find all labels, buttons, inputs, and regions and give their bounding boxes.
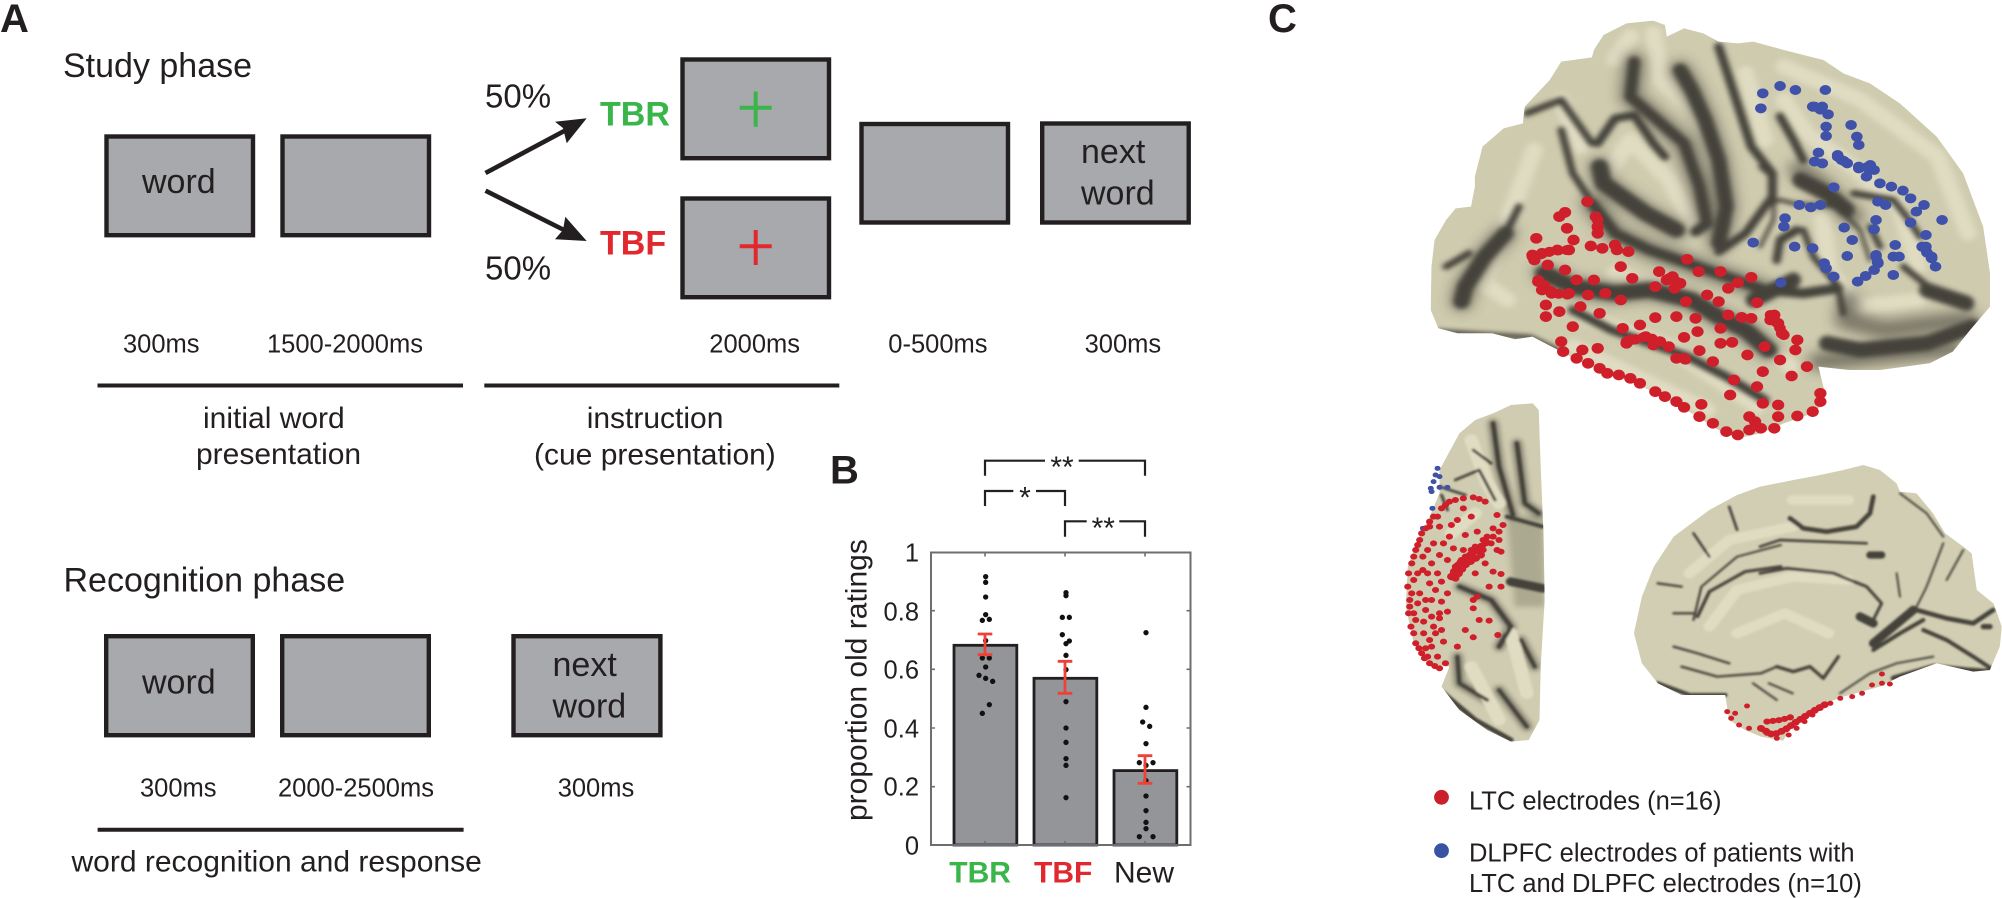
y tick labels (884, 540, 919, 860)
significance brackets: * (1019, 482, 1031, 514)
y tick labels: 0.2 (884, 774, 919, 802)
significance brackets: ** (1092, 512, 1115, 545)
y tick labels: 0 (905, 832, 919, 860)
label: 50% lower: 50% (485, 250, 551, 287)
legend text: DLPFC: DLPFC electrodes of patients with (1469, 840, 1855, 868)
bracket line: instruction (484, 384, 839, 388)
arrow: to TBF (486, 191, 587, 241)
label: TBF: TBF (600, 225, 666, 263)
individual data points (979, 577, 1153, 837)
stimulus box: next word (1042, 124, 1189, 222)
label: TBR: TBR (600, 95, 670, 133)
brain: lateral view with electrodes (1423, 13, 1999, 447)
stimulus box: next word: word (1080, 175, 1155, 213)
stimulus box: next word: next (552, 646, 617, 684)
significance brackets: ** (1050, 451, 1074, 484)
timing: 300ms: 300ms (123, 331, 200, 359)
stimulus box: word (106, 136, 253, 235)
stimulus box: word: word (141, 163, 216, 201)
stimulus box: word: word (141, 663, 216, 701)
legend marker: LTC (1434, 790, 1449, 805)
axes frame (931, 552, 1190, 845)
error bars (978, 634, 1152, 783)
caption: instruction: (cue presentation) (534, 438, 776, 471)
timing: 2000-2500ms: 2000-2500ms (278, 775, 434, 803)
category label: TBF: TBF (1034, 857, 1092, 890)
timing: 0-500ms: 0-500ms (888, 331, 988, 359)
stimulus box: next word (514, 636, 660, 735)
stimulus box: next word: word (552, 687, 626, 725)
caption: initial word presentation: initial word (203, 402, 345, 435)
caption: initial word presentation (196, 402, 361, 471)
axis label: proportion old ratings: proportion old ratings (840, 539, 873, 821)
heading: recognition phase: Recognition phase (64, 562, 345, 600)
stimulus box: word (106, 636, 253, 735)
caption: initial word presentation: presentation (196, 438, 361, 471)
panel: bar chart of proportion old ratings (840, 451, 1190, 890)
bracket line: word recognition (98, 828, 464, 832)
caption: instruction (534, 402, 776, 471)
category label: New: New (1114, 857, 1174, 890)
legend text: LTC: LTC electrodes (n=16) (1469, 787, 1722, 815)
stimulus box: blank (282, 636, 429, 735)
brain: ventral view with electrodes (1400, 400, 1551, 747)
legend text: DLPFC: LTC and DLPFC electrodes (n=10) (1469, 870, 1862, 898)
label: 50% upper: 50% (485, 78, 551, 115)
bars (954, 645, 1177, 845)
timing: 300ms: 300ms (558, 775, 634, 803)
legend text: DLPFC (1469, 840, 1862, 898)
timing: 300ms: 300ms (140, 775, 217, 803)
brain: medial view with electrodes (1630, 463, 2002, 747)
y tick labels: 1 (905, 540, 919, 568)
caption: instruction: instruction (587, 402, 723, 435)
timing: 1500-2000ms: 1500-2000ms (267, 331, 423, 359)
panel label B: B (830, 448, 859, 492)
y tick labels: 0.6 (884, 656, 919, 684)
legend marker: DLPFC (1434, 843, 1449, 858)
timing: 300ms: 300ms (1085, 331, 1161, 359)
stimulus box: next word: next (1081, 133, 1146, 171)
arrow: to TBR (486, 118, 587, 173)
y tick labels: 0.8 (884, 598, 919, 626)
bracket line: initial word presentation (98, 384, 463, 388)
stimulus box: blank interval (862, 124, 1008, 222)
y tick labels: 0.4 (884, 715, 919, 743)
timing: 2000ms: 2000ms (709, 331, 800, 359)
stimulus box: blank (282, 136, 429, 235)
legend (1434, 787, 1862, 898)
heading: study phase: Study phase (63, 47, 252, 85)
panel: recognition phase (64, 562, 660, 879)
significance brackets (985, 451, 1145, 545)
category label: TBR: TBR (949, 857, 1011, 890)
panel: study phase (63, 47, 1189, 471)
stimulus box: green cross (682, 60, 829, 158)
caption: word recognition and response: word recognition and response (70, 846, 482, 879)
stimulus box: red cross (682, 198, 829, 297)
